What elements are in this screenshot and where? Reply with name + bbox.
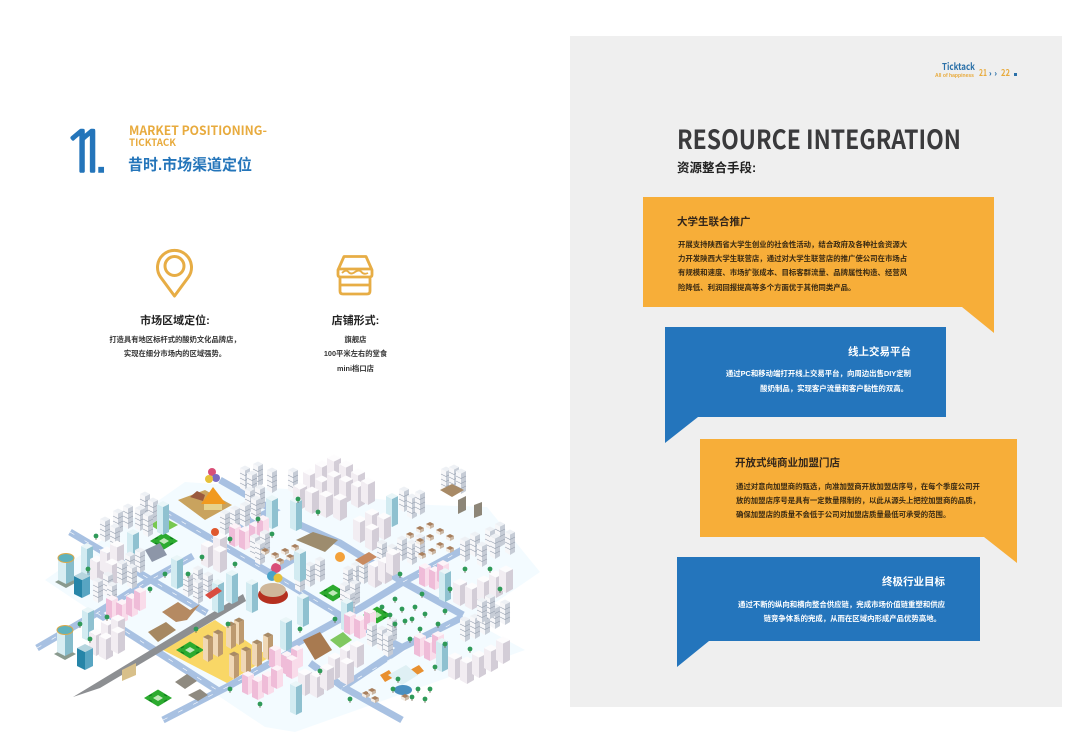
yellow residential plot — [163, 620, 270, 683]
callout body: 通过对意向加盟商的甄选，向准加盟商开放加盟店序号，在每个季度公司开 — [736, 482, 981, 491]
tower blocks — [54, 454, 515, 715]
page arrows: ›› — [989, 69, 997, 78]
callout body — [678, 240, 908, 292]
callout body: 险降低、利润回报提高等多个方面优于其他同类产品。 — [678, 283, 855, 292]
callout body: 酸奶制品，实现客户流量和客户黏性的双高。 — [760, 384, 908, 393]
callout body — [736, 482, 981, 519]
text block: store format — [324, 313, 388, 373]
landmarks — [122, 468, 482, 701]
trees — [78, 497, 502, 708]
brand header — [935, 59, 1017, 79]
english title line 1: MARKET POSITIONING- — [129, 120, 267, 139]
callout heading: 大学生联合推广 — [677, 215, 750, 228]
callout heading: 终极行业目标 — [882, 575, 945, 588]
callout body: 开展支持陕西省大学生创业的社会性活动，结合政府及各种社会资源大 — [678, 240, 908, 249]
callout shape — [677, 557, 980, 667]
page number right: 22 — [1001, 66, 1010, 79]
callout body: 确保加盟店的质量不会低于公司对加盟店质量最低可承受的范围。 — [736, 510, 950, 519]
brand logo: Ticktack — [942, 59, 975, 73]
panel background — [570, 36, 1062, 707]
callout body — [726, 369, 911, 393]
icon: storefront — [338, 256, 372, 294]
callout heading: 线上交易平台 — [848, 345, 911, 358]
callout shape — [665, 327, 946, 443]
callout: franchise stores — [700, 439, 1017, 563]
isometric city illustration — [37, 454, 540, 732]
icon: location pin — [157, 250, 192, 296]
left section heading — [63, 120, 267, 181]
page number left: 21 — [979, 66, 987, 79]
callout: student promotion — [643, 197, 994, 333]
panel subtitle: 资源整合手段: — [677, 160, 756, 175]
callout body: 通过PC和移动端打开线上交易平台，向周边出售DIY定制 — [726, 369, 911, 378]
callout shape — [643, 197, 994, 333]
panel: resource integration — [570, 36, 1062, 707]
city ground — [45, 482, 540, 732]
callout heading: 开放式纯商业加盟门店 — [735, 456, 840, 469]
callout: online platform — [665, 327, 946, 443]
heading: 市场区域定位: — [140, 313, 210, 327]
callout body — [738, 600, 946, 623]
page marker — [1014, 73, 1017, 76]
brown low-rise houses — [261, 522, 454, 703]
section number: 11 — [63, 124, 84, 181]
city roads — [37, 480, 477, 720]
english title line 2: TICKTACK — [129, 134, 176, 149]
heading: 店铺形式: — [332, 313, 379, 327]
text block: market area positioning: 实现在细分市场内的区域强势。 — [124, 349, 226, 358]
text block: store format: 100平米左右的堂食 — [324, 349, 388, 358]
chinese title: 昔时.市场渠道定位 — [128, 155, 252, 174]
low-rise civic buildings — [162, 602, 200, 622]
callout body: 通过不断的纵向和横向整合供应链，完成市场价值链重塑和供应 — [738, 600, 946, 609]
description: 打造具有地区标杆式的酸奶文化品牌店， — [109, 335, 241, 344]
section number: . — [99, 167, 104, 172]
callout body: 链竞争体系的完成，从而在区域内形成产品优势高地。 — [764, 614, 941, 623]
callout: ultimate goal — [677, 557, 980, 667]
elevated rail line — [73, 594, 246, 697]
text block: market area positioning — [109, 313, 241, 358]
description: 旗舰店 — [345, 335, 366, 344]
brand slogan: All of happiness — [935, 73, 974, 79]
red rotunda with balloons — [258, 563, 288, 604]
callout body: 放的加盟店序号是具有一定数量限制的，以此从源头上把控加盟商的品质， — [736, 496, 980, 505]
callout body: 有规模和速度、市场扩张成本、目标客群流量、品牌属性构造、经营风 — [678, 268, 908, 277]
callout body: 力开发陕西大学生联营店，通过对大学生联营店的推广使公司在市场占 — [678, 254, 907, 263]
green plazas — [144, 517, 391, 706]
carousel park — [178, 468, 232, 520]
callout shape — [700, 439, 1017, 563]
text block: store format: mini档口店 — [337, 364, 374, 373]
panel title: RESOURCE INTEGRATION — [677, 118, 961, 157]
